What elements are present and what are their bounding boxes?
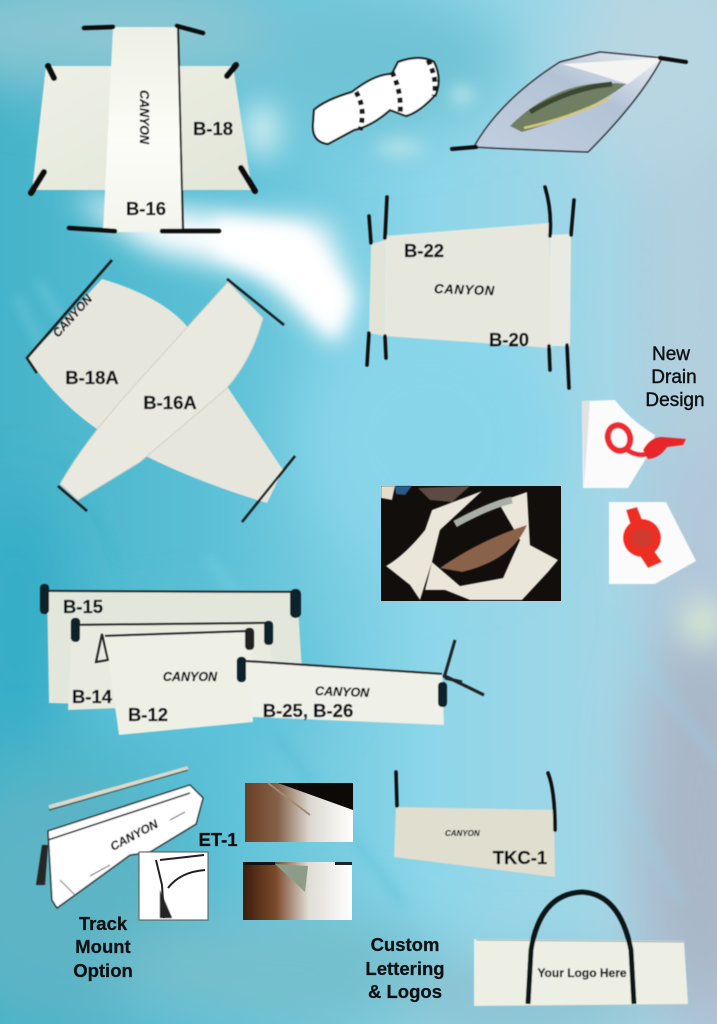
icon: red drain valve, top view (609, 502, 696, 584)
icon: red drain valve, side view (582, 400, 686, 488)
caption: Track Mount Option (73, 913, 133, 981)
product: ET-1 track mount bag: CANYON (108, 817, 161, 854)
label: B-20: B-20 (489, 329, 529, 350)
product: ET-1 track mount bag (36, 768, 203, 908)
icon: rolled bag (313, 58, 439, 144)
product: TKC-1 bag: CANYON (445, 829, 480, 838)
bag: B-18A: B-18A (65, 367, 119, 388)
caption: Track Mount Option: Track (79, 913, 128, 934)
caption: Custom Lettering & Logos (365, 934, 445, 1002)
callout: New Drain Design: Design (645, 390, 705, 411)
product: B-18A and B-16A bags (27, 260, 295, 522)
product: B-14 bag: B-14 (72, 686, 113, 707)
caption: Track Mount Option: Option (73, 960, 133, 981)
bag: B-18 (31, 65, 255, 193)
bag: B-18: B-18 (193, 118, 233, 139)
product: B-18 and B-16 cross bags (31, 26, 255, 232)
caption: Custom Lettering & Logos: & Logos (368, 981, 442, 1002)
bag: B-16: B-16 (126, 198, 166, 219)
product: custom duffel bag (474, 892, 688, 1006)
bag: B-18A (27, 260, 295, 522)
bag: B-16A (58, 279, 284, 511)
product: B-25, B-26 bag (237, 640, 484, 725)
photo: open bag with fish (381, 486, 561, 601)
callout: New Drain Design (645, 344, 705, 411)
label: B-22: B-22 (404, 240, 444, 261)
product: B-12 bag: CANYON (163, 670, 218, 684)
product: B-14 bag (68, 618, 273, 710)
product: TKC-1 bag (394, 772, 555, 877)
streaks (18, 285, 717, 900)
callout: New Drain Design: New (652, 344, 690, 365)
photo: ET-1 detail top (245, 783, 353, 842)
product: B-15 bag: B-15 (63, 596, 103, 617)
product: B-22 and B-20 bags (367, 187, 574, 388)
product: B-12 bag: B-12 (128, 704, 168, 725)
product: B-12 bag (96, 628, 254, 735)
bag: B-18A: CANYON (50, 292, 95, 340)
caption: Custom Lettering & Logos: Custom (371, 934, 439, 955)
photo: ET-1 detail bottom (243, 862, 352, 920)
bag: B-16A: B-16A (143, 392, 197, 413)
label: ET-1: ET-1 (198, 829, 238, 850)
caption: Track Mount Option: Mount (75, 936, 131, 957)
bag: B-16 (69, 26, 219, 232)
logo: Canyon: CANYON (434, 281, 495, 298)
product: B-15 bag (40, 584, 302, 705)
photo: fish in open bag (452, 52, 686, 152)
product: B-25, B-26 bag: B-25, B-26 (263, 700, 353, 721)
bag: B-16: CANYON (137, 90, 151, 145)
product: B-25, B-26 bag: CANYON (315, 684, 370, 700)
photo: track detail inset (139, 852, 208, 920)
product: custom duffel bag: Your Logo Here (537, 966, 627, 980)
product: TKC-1 bag: TKC-1 (493, 847, 547, 868)
callout: New Drain Design: Drain (651, 367, 697, 388)
caption: Custom Lettering & Logos: Lettering (365, 958, 445, 979)
